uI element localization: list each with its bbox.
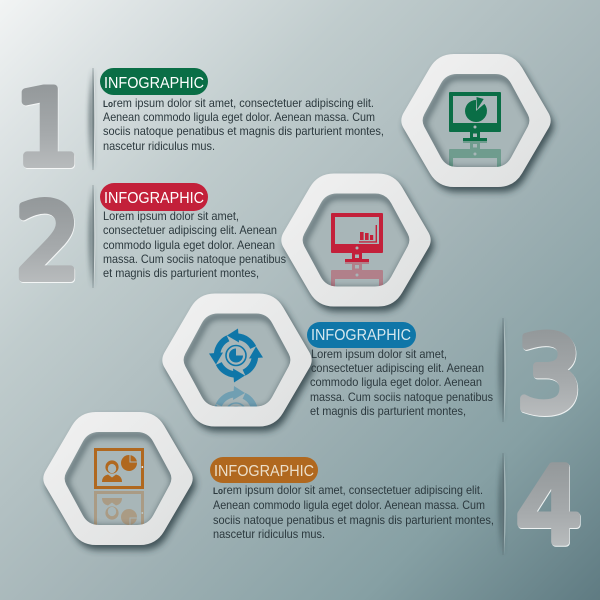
text block 1: sociis natoque penatibus et magnis dis parturient montes, — [103, 124, 384, 138]
hexagon frame 1 — [401, 54, 554, 192]
icon reflection: red monitor — [331, 262, 383, 286]
text block 4 — [213, 483, 494, 541]
hexagon frame 4 — [43, 412, 196, 550]
text block 4: Aenean commodo ligula eget dolor. Aenean massa. Cum — [213, 498, 485, 512]
numeral 3: 3 — [517, 316, 582, 436]
text block 3: massa. Cum sociis natoque penatibus — [310, 390, 493, 404]
text block 3 — [310, 347, 493, 418]
text block 4: nascetur ridiculus mus. — [213, 527, 325, 541]
divider 3 — [499, 318, 506, 422]
text block 2: commodo ligula eget dolor. Aenean — [103, 238, 275, 252]
text block 3: commodo ligula eget dolor. Aenean — [310, 375, 482, 389]
icon: orange presentation board with person and pie chart — [94, 448, 144, 489]
numeral 2: 2 — [16, 184, 81, 304]
text block 2: Lorem ipsum dolor sit amet, — [103, 209, 239, 223]
heading pill: red — [100, 183, 208, 211]
text block 2: et magnis dis parturient montes, — [103, 266, 259, 280]
panel: step 4 — [43, 412, 582, 568]
icon reflection: green monitor — [449, 141, 501, 167]
text block 3: consectetuer adipiscing elit. Aenean — [311, 361, 484, 375]
heading pill: orange: INFOGRAPHIC — [214, 463, 314, 480]
divider 4 — [499, 453, 506, 555]
numeral 2: 2 — [15, 183, 81, 303]
panel: step 1 — [14, 54, 554, 192]
divider 2 — [89, 185, 96, 288]
icon reflection: blue circular arrows — [214, 386, 258, 406]
text block 2: massa. Cum sociis natoque penatibus — [103, 252, 286, 266]
heading pill: red: INFOGRAPHIC — [104, 190, 204, 207]
text block 4: sociis natoque penatibus et magnis dis parturient montes, — [213, 513, 494, 527]
text block 1 — [103, 96, 384, 153]
panel: step 2 — [15, 174, 434, 312]
icon: blue circular arrows with clock — [209, 328, 263, 382]
numeral 1: 1 — [15, 70, 81, 190]
icon: green monitor with pie chart — [449, 92, 501, 141]
text block 1: Lorem ipsum dolor sit amet, consectetuer adipiscing elit. — [103, 96, 374, 110]
numeral 4: 4 — [517, 448, 582, 568]
divider 1 — [89, 68, 96, 170]
text block 3: et magnis dis parturient montes, — [310, 404, 466, 418]
text block 1: Aenean commodo ligula eget dolor. Aenean massa. Cum — [103, 110, 375, 124]
text block 2 — [103, 209, 286, 280]
numeral 3: 3 — [516, 316, 582, 436]
icon: red monitor with bar chart — [331, 213, 383, 262]
heading pill: blue: INFOGRAPHIC — [311, 327, 411, 344]
heading pill: green — [100, 68, 208, 95]
text block 2: consectetuer adipiscing elit. Aenean — [103, 223, 277, 237]
text block 4: Lorem ipsum dolor sit amet, consectetuer adipiscing elit. — [213, 483, 483, 497]
heading pill: orange — [210, 457, 318, 483]
text block 1: nascetur ridiculus mus. — [103, 139, 215, 153]
numeral 4: 4 — [516, 447, 582, 567]
heading pill: blue — [307, 322, 416, 348]
hexagon frame 3 — [162, 294, 315, 432]
text block 3: Lorem ipsum dolor sit amet, — [311, 347, 447, 361]
heading pill: green: INFOGRAPHIC — [104, 75, 204, 92]
panel: step 3 — [162, 294, 582, 440]
icon reflection: orange board — [94, 491, 144, 525]
hexagon frame 2 — [281, 174, 434, 312]
numeral 1: 1 — [14, 69, 80, 189]
